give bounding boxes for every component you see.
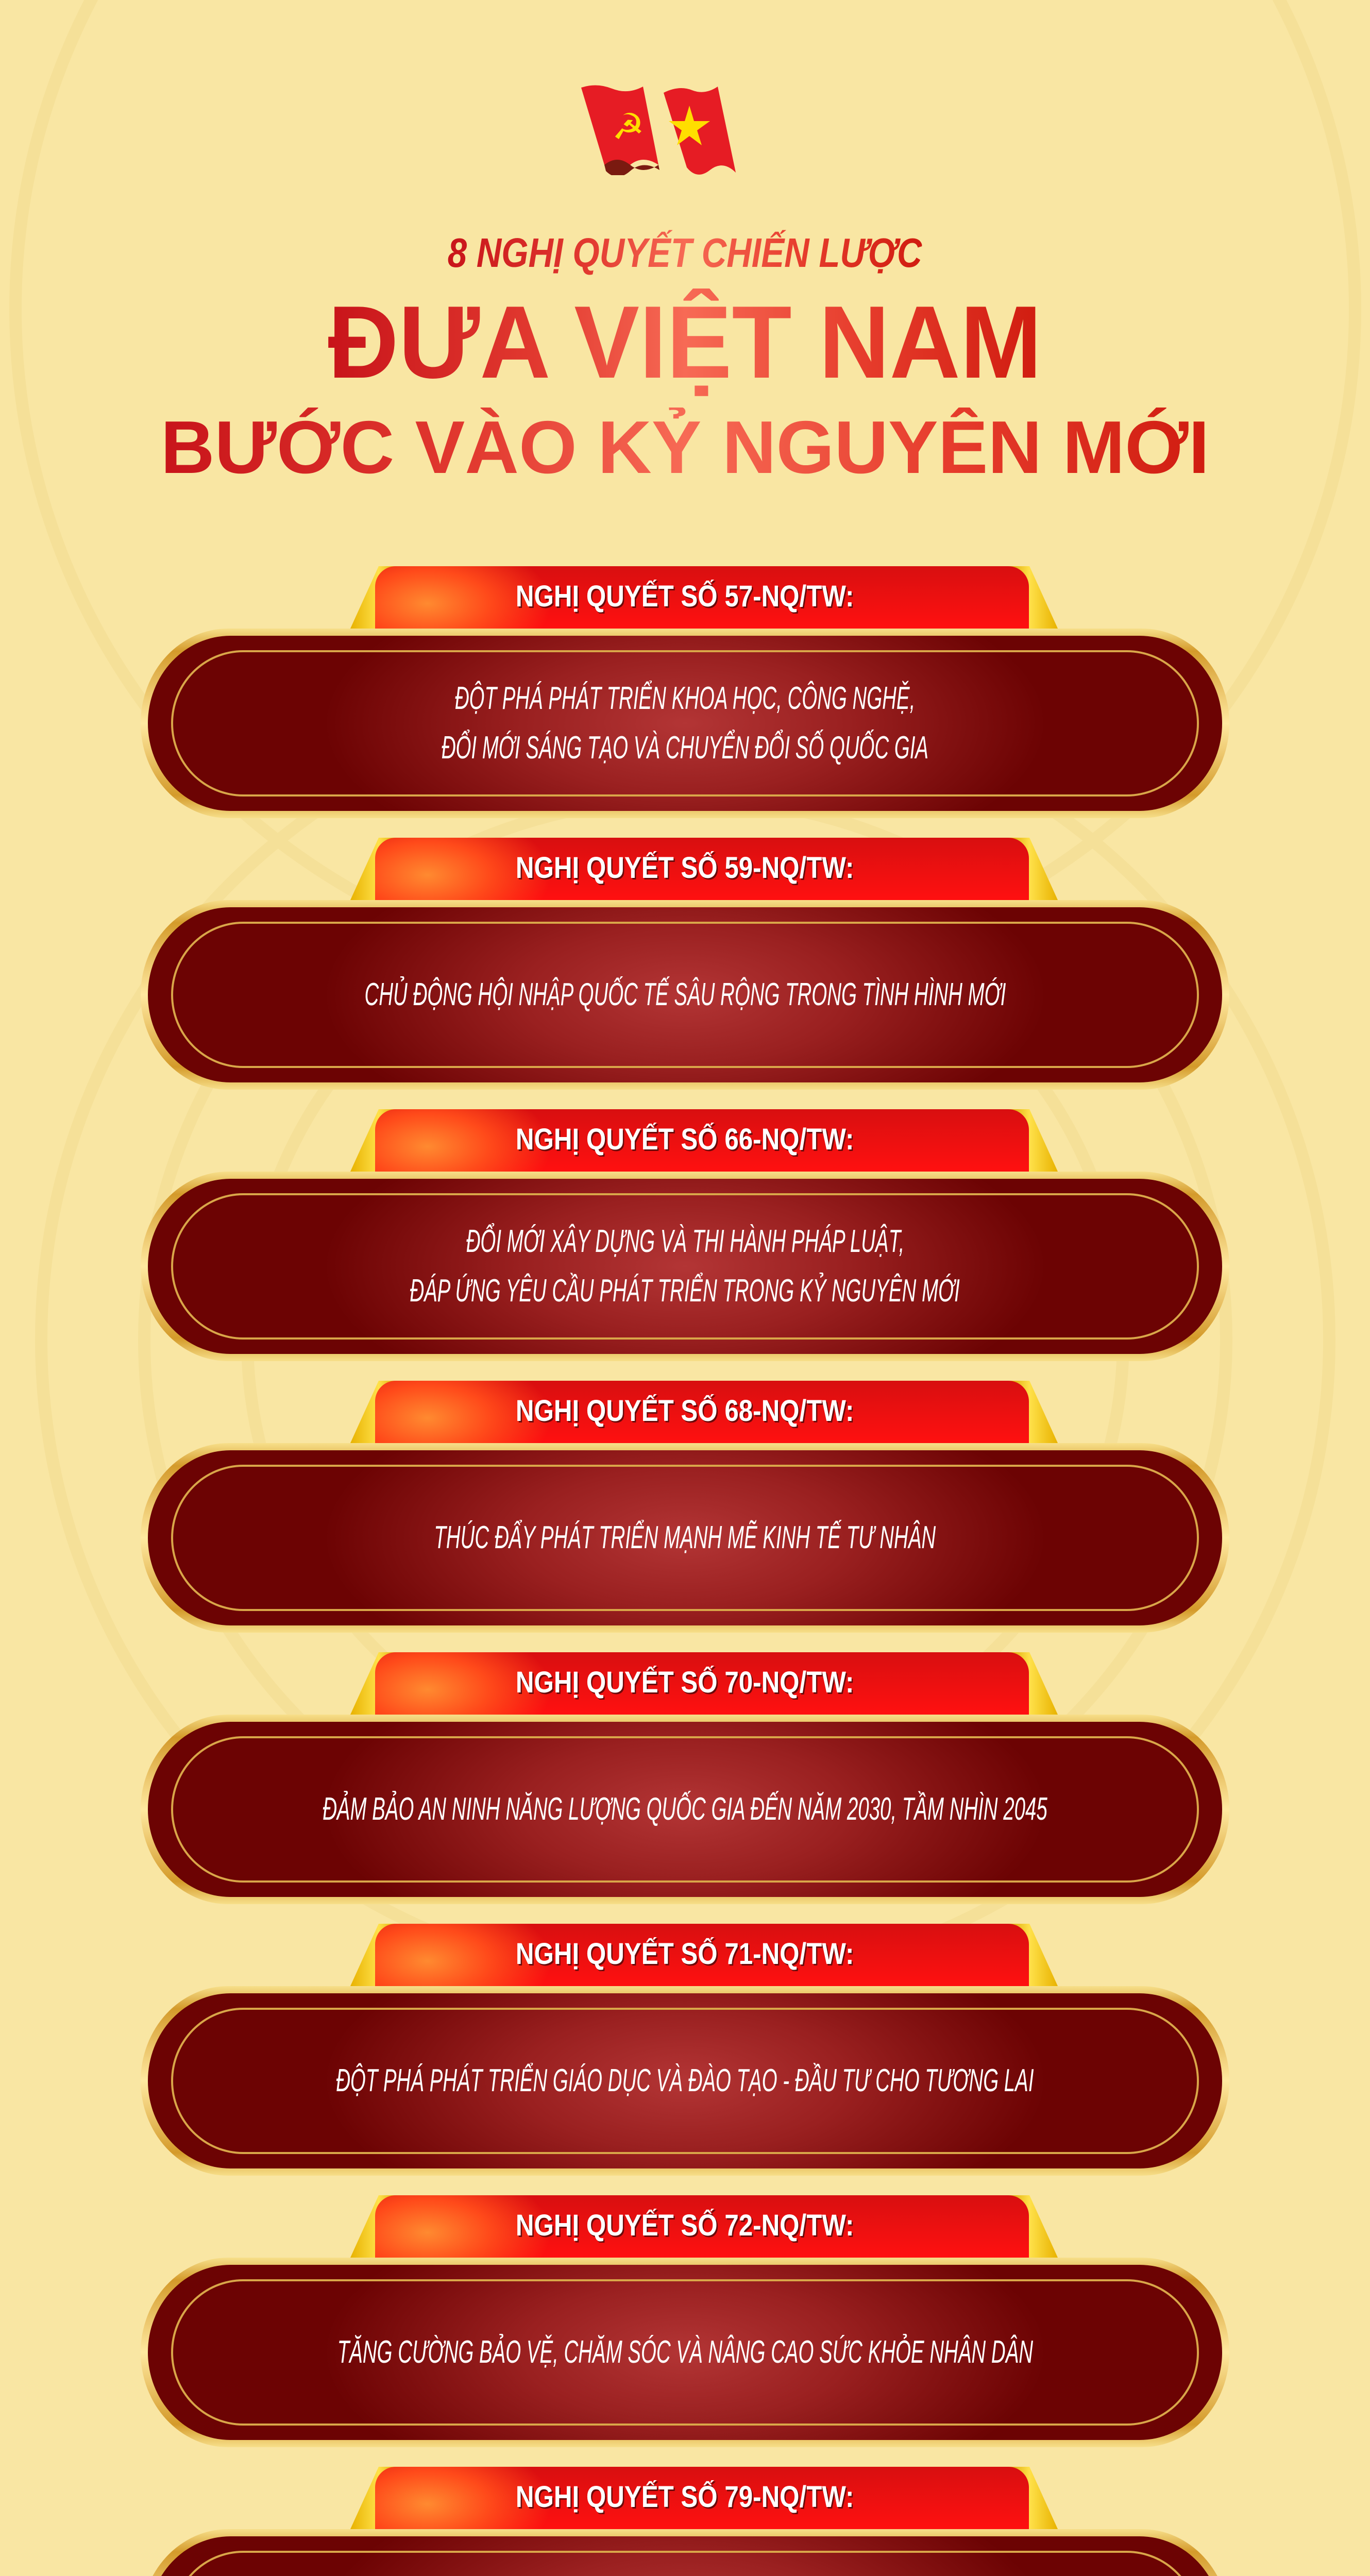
panel: resolution 71: NGHỊ QUYẾT SỐ 71-NQ/TW: bbox=[516, 1937, 854, 1971]
panel: resolution 57 bbox=[141, 566, 1229, 818]
panel: resolution 71 bbox=[141, 1924, 1229, 2176]
panel: resolution 57: ĐỔI MỚI SÁNG TẠO VÀ CHUYỂN ĐỔI SỐ QUỐC GIA bbox=[442, 730, 928, 766]
panel: resolution 79: NGHỊ QUYẾT SỐ 79-NQ/TW: bbox=[516, 2480, 854, 2514]
panel: resolution 70: NGHỊ QUYẾT SỐ 70-NQ/TW: bbox=[516, 1666, 854, 1699]
panel: resolution 72: NGHỊ QUYẾT SỐ 72-NQ/TW: bbox=[516, 2209, 854, 2242]
panel: resolution 66: ĐÁP ỨNG YÊU CẦU PHÁT TRIỂN TRONG KỶ NGUYÊN MỚI bbox=[410, 1273, 960, 1309]
panel: resolution 59 bbox=[141, 838, 1229, 1090]
panel: resolution 59: CHỦ ĐỘNG HỘI NHẬP QUỐC TẾ SÂU RỘNG TRONG TÌNH HÌNH MỚI bbox=[364, 977, 1006, 1012]
panel: resolution 66: ĐỔI MỚI XÂY DỰNG VÀ THI HÀNH PHÁP LUẬT, bbox=[466, 1224, 904, 1259]
panel: resolution 71: ĐỘT PHÁ PHÁT TRIỂN GIÁO DỤC VÀ ĐÀO TẠO - ĐẦU TƯ CHO TƯƠNG LAI bbox=[336, 2063, 1034, 2098]
icon: flags bbox=[581, 86, 736, 175]
panel: resolution 68: THÚC ĐẨY PHÁT TRIỂN MẠNH MẼ KINH TẾ TƯ NHÂN bbox=[434, 1520, 936, 1555]
panel: resolution 66 bbox=[141, 1109, 1229, 1361]
panel: resolution 79 bbox=[153, 2467, 1217, 2576]
panel: resolution 68: NGHỊ QUYẾT SỐ 68-NQ/TW: bbox=[516, 1394, 854, 1428]
panel: resolution 57: ĐỘT PHÁ PHÁT TRIỂN KHOA HỌC, CÔNG NGHỆ, bbox=[455, 681, 915, 716]
panel: resolution 59: NGHỊ QUYẾT SỐ 59-NQ/TW: bbox=[516, 851, 854, 885]
icon: flags: ☭ bbox=[612, 106, 645, 148]
panel: resolution 70 bbox=[141, 1652, 1229, 1904]
panel: resolution 68 bbox=[141, 1381, 1229, 1633]
panel: resolution 66: NGHỊ QUYẾT SỐ 66-NQ/TW: bbox=[516, 1123, 854, 1156]
panel: resolution 72 bbox=[141, 2195, 1229, 2447]
panel: resolution 70: ĐẢM BẢO AN NINH NĂNG LƯỢNG QUỐC GIA ĐẾN NĂM 2030, TẦM NHÌN 2045 bbox=[323, 1791, 1047, 1827]
panel: resolution 57: NGHỊ QUYẾT SỐ 57-NQ/TW: bbox=[516, 580, 854, 613]
title: 8 nghị quyết chiến lược: 8 NGHỊ QUYẾT CHIẾN LƯỢC bbox=[448, 230, 922, 276]
panel: resolution 72: TĂNG CƯỜNG BẢO VỆ, CHĂM SÓC VÀ NÂNG CAO SỨC KHỎE NHÂN DÂN bbox=[337, 2334, 1033, 2370]
